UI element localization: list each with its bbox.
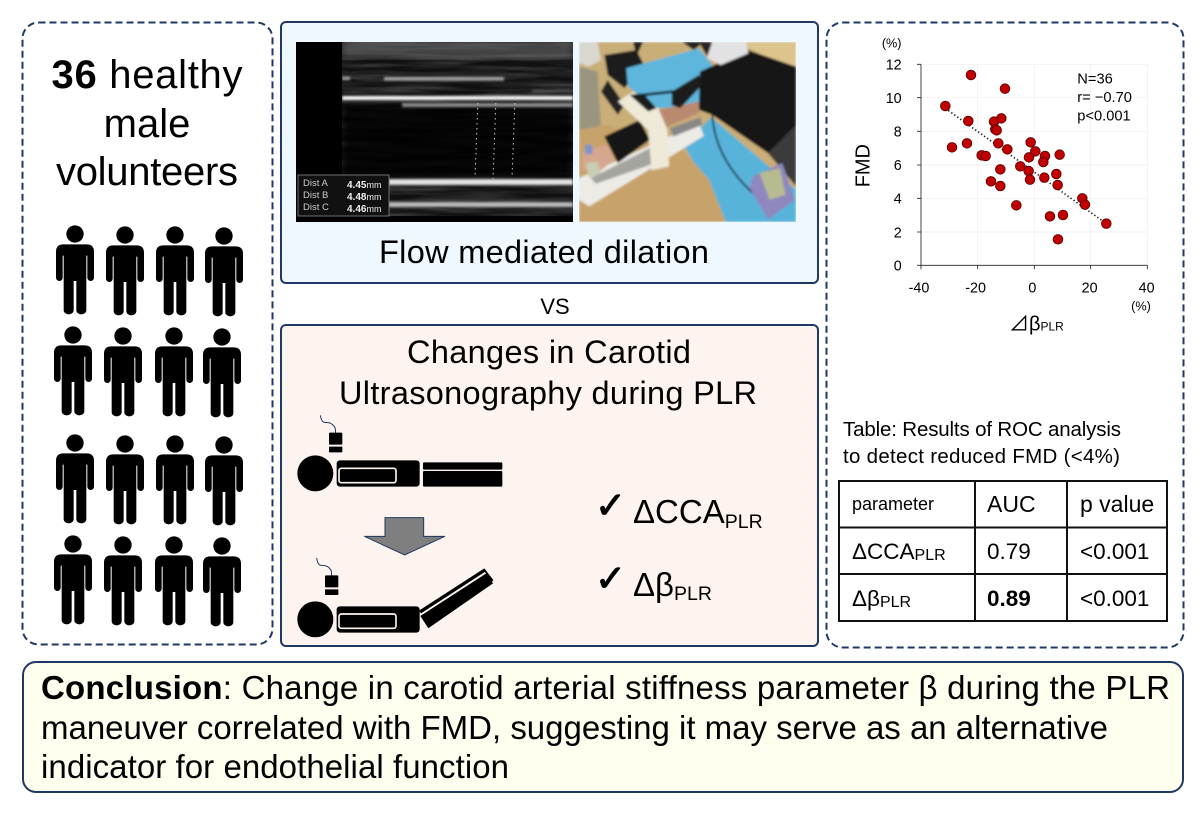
panel: conclusion: [23, 662, 1183, 792]
statistics note: [1077, 71, 1132, 124]
caption: flow mediated dilation: Flow mediated dilation: [379, 234, 709, 270]
statistics note: p<0.001: [1077, 108, 1131, 124]
statistics note: r= −0.70: [1077, 90, 1132, 106]
axis labels: [886, 57, 1155, 296]
axis labels: 8: [894, 125, 902, 141]
table: ROC analysis: [839, 481, 1167, 621]
data points: [940, 70, 1111, 244]
axis labels: 20: [1082, 280, 1098, 296]
label: VS: VS: [540, 294, 570, 319]
checklist: delta beta PLR: [595, 557, 712, 605]
checklist: delta CCA PLR: ✓: [595, 484, 626, 527]
heading: 36 healthy male volunteers: 36 healthy: [52, 53, 242, 97]
distance readout: 4.46mm: [347, 204, 381, 215]
scatter chart: FMD vs delta beta PLR: FMD: [852, 144, 874, 187]
photo: FMD measurement setup: [579, 42, 796, 222]
trend line: [945, 108, 1106, 224]
panel: carotid ultrasonography during PLR: [281, 325, 818, 646]
table: ROC analysis: 0.89: [987, 586, 1031, 611]
table title: [843, 418, 1121, 468]
table: ROC analysis: p value: [1080, 491, 1154, 517]
statistics note: N=36: [1077, 71, 1113, 87]
checklist: delta CCA PLR: ΔCCA: [633, 493, 725, 530]
table: ROC analysis: AUC: [987, 491, 1036, 517]
table title: Table: Results of ROC analysis: [843, 418, 1121, 441]
heading: 36 healthy male volunteers: [52, 53, 242, 194]
conclusion text: Conclusion: Change in carotid arterial stiffness parameter β during the PLR: [41, 669, 1170, 706]
table: ROC analysis: Δβ: [852, 586, 880, 611]
icon grid: 16 people: [54, 225, 243, 626]
table: ROC analysis: PLR: [880, 594, 911, 611]
axis labels: 2: [894, 225, 902, 241]
conclusion text: indicator for endothelial function: [41, 748, 509, 785]
diagrams: passive leg raising: [297, 415, 502, 637]
icon: subject with legs raised: [297, 558, 493, 637]
distance readout: Dist B: [303, 190, 328, 201]
distance readout: [298, 175, 389, 216]
panel: flow mediated dilation: [281, 22, 818, 283]
axis labels: 10: [886, 91, 902, 107]
axis labels: 40: [1139, 280, 1155, 296]
table: ROC analysis: parameter: [852, 494, 934, 514]
axis labels: 12: [886, 57, 902, 73]
conclusion text: maneuver correlated with FMD, suggesting it may serve as an alternative: [41, 709, 1108, 746]
conclusion text: [41, 669, 1170, 785]
distance readout: 4.48mm: [347, 192, 381, 203]
distance readout: 4.45mm: [347, 180, 381, 191]
heading: 36 healthy male volunteers: volunteers: [56, 150, 238, 194]
table: ROC analysis: 0.79: [987, 539, 1031, 564]
checklist: delta beta PLR: PLR: [674, 583, 712, 605]
ultrasound image: [296, 42, 573, 222]
heading: changes in carotid ultrasonography: Ultrasonography during PLR: [339, 375, 757, 411]
checklist: delta beta PLR: ✓: [595, 557, 626, 600]
table: ROC analysis: PLR: [915, 547, 946, 564]
table: ROC analysis: <0.001: [1080, 586, 1149, 611]
scatter chart: FMD vs delta beta PLR: (%): [1131, 299, 1151, 313]
scatter chart: FMD vs delta beta PLR: [852, 36, 1155, 336]
axis labels: 6: [894, 158, 902, 174]
panel: participants: [22, 22, 272, 644]
axis labels: 0: [894, 259, 902, 275]
axis labels: 0: [1028, 280, 1036, 296]
heading: changes in carotid ultrasonography: Changes in Carotid: [407, 334, 691, 370]
table title: to detect reduced FMD (<4%): [843, 445, 1120, 468]
panel: results: [826, 22, 1184, 648]
measurement calipers: [475, 98, 515, 179]
axis labels: -40: [909, 280, 929, 296]
checklist: delta CCA PLR: [595, 484, 763, 533]
heading: 36 healthy male volunteers: male: [104, 102, 190, 146]
axis labels: -20: [965, 280, 986, 296]
table: ROC analysis: ΔCCA: [852, 539, 915, 564]
icon: supine subject with probe: [297, 415, 502, 491]
distance readout: Dist C: [303, 202, 329, 213]
checklist: delta beta PLR: Δβ: [633, 566, 674, 603]
table: ROC analysis: <0.001: [1080, 539, 1149, 564]
scatter chart: FMD vs delta beta PLR: ⊿βPLR: [1009, 314, 1064, 336]
axis labels: 4: [894, 192, 902, 208]
arrow: down: [364, 518, 445, 555]
heading: changes in carotid ultrasonography: [339, 334, 757, 411]
scatter chart: FMD vs delta beta PLR: (%): [882, 36, 902, 50]
distance readout: Dist A: [303, 178, 328, 189]
checklist: delta CCA PLR: PLR: [725, 511, 763, 533]
